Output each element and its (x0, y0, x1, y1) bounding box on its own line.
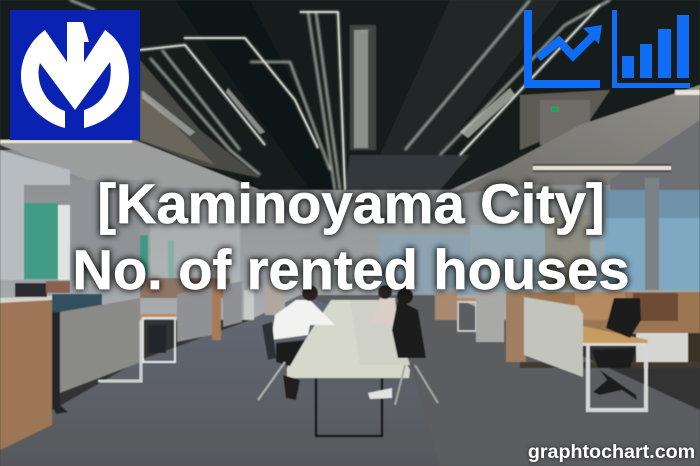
dark ceiling (0, 0, 700, 190)
back partitions (177, 288, 212, 342)
ceiling lettering strips (350, 25, 376, 150)
man in white shirt (271, 300, 335, 340)
icon: blue bar chart (612, 10, 690, 88)
exit sign (551, 107, 559, 112)
left window with trees (24, 203, 58, 279)
title: line 1: [Kaminoyama City] (97, 172, 605, 235)
icon: blue line chart (528, 10, 602, 84)
glowing ceiling lights (70, 0, 610, 190)
title: line 2: No. of rented houses (73, 238, 629, 301)
right wood wall (506, 292, 700, 334)
left wood cabinet (0, 298, 52, 450)
title shadow (73, 172, 629, 301)
icon: blue city logo (10, 10, 140, 140)
right back desks (435, 292, 457, 320)
woman and colleague (372, 298, 398, 325)
floor carpet (0, 295, 700, 466)
title shadow: [Kaminoyama City] (97, 172, 605, 235)
office chair (592, 298, 641, 400)
right ceiling panel (450, 85, 700, 200)
man's chair (262, 322, 276, 360)
central table (287, 300, 410, 378)
left partition (60, 298, 141, 393)
right windows (605, 190, 700, 290)
right desk top (583, 326, 648, 345)
small back desk (140, 314, 176, 318)
watermark: graphtochart.com (528, 441, 695, 463)
right partition (524, 297, 583, 377)
left light strip (0, 140, 132, 143)
back wall (0, 150, 700, 320)
title shadow: No. of rented houses (73, 238, 629, 301)
back desks (15, 283, 47, 297)
left ceiling panel (0, 140, 260, 190)
ceiling light right (533, 164, 671, 172)
